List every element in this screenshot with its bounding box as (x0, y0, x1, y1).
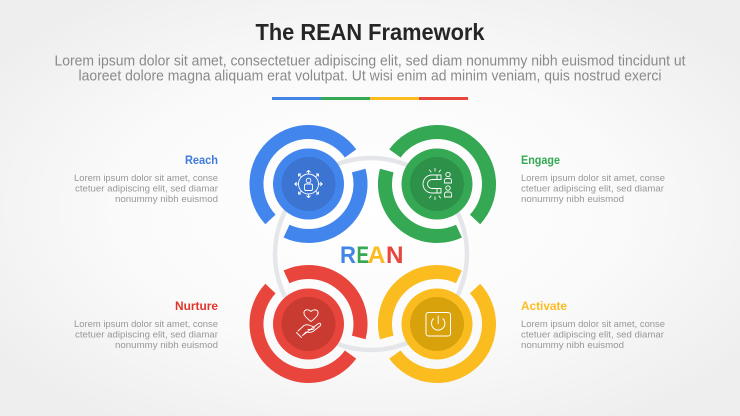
text block: Activate: nonummy nibh euismod (521, 340, 624, 351)
text block: Reach: Reach (185, 155, 218, 167)
text block: Engage: nonummy nibh euismod (521, 194, 624, 205)
text block: Nurture: ctetuer adipiscing elit, sed diamar (75, 330, 218, 340)
text block: Activate (521, 301, 665, 351)
connecting ring (275, 158, 467, 350)
intro text: laoreet dolore magna aliquam erat volutpat. Ut wisi enim ad minim veniam, quis nostrud exerci (78, 68, 662, 84)
text block: Reach: Lorem ipsum dolor sit amet, conse (74, 173, 218, 184)
icon: power button (426, 312, 450, 336)
text block: Engage (521, 155, 665, 205)
icon: magnet and people (423, 168, 452, 200)
text block: Nurture: nonummy nibh euismod (115, 340, 218, 351)
panel: Nurture circle (256, 272, 361, 376)
center label: REAN: A (368, 242, 386, 269)
divider bar (272, 97, 468, 100)
center label: REAN: N (386, 242, 404, 269)
intro text: Lorem ipsum dolor sit amet, consectetuer adipiscing elit, sed diam nonummy nibh euismod tincidunt ut (54, 54, 686, 70)
icon: person network (295, 170, 322, 198)
icon: heart in hand (296, 310, 321, 338)
text block: Activate: Activate (521, 301, 567, 313)
text block: Nurture: Lorem ipsum dolor sit amet, conse (74, 319, 218, 330)
text block: Reach: ctetuer adipiscing elit, sed diamar (75, 184, 218, 194)
intro text (54, 54, 686, 84)
panel: Activate circle (385, 272, 489, 376)
panel: Reach circle (256, 132, 361, 236)
title: The REAN Framework (256, 19, 485, 45)
text block: Nurture (74, 301, 218, 351)
text block: Engage: Lorem ipsum dolor sit amet, conse (521, 173, 665, 184)
text block: Engage: Engage (521, 155, 560, 167)
text block: Activate: ctetuer adipiscing elit, sed diamar (521, 330, 664, 340)
text block: Nurture: Nurture (175, 301, 218, 313)
text block: Activate: Lorem ipsum dolor sit amet, conse (521, 319, 665, 330)
panel: Engage circle (385, 132, 489, 236)
text block: Engage: ctetuer adipiscing elit, sed diamar (521, 184, 664, 194)
text block: Reach (74, 155, 218, 205)
center label: REAN: R (340, 242, 356, 269)
center label: REAN (340, 242, 404, 269)
text block: Reach: nonummy nibh euismod (115, 194, 218, 205)
center label: REAN: E (356, 242, 369, 269)
